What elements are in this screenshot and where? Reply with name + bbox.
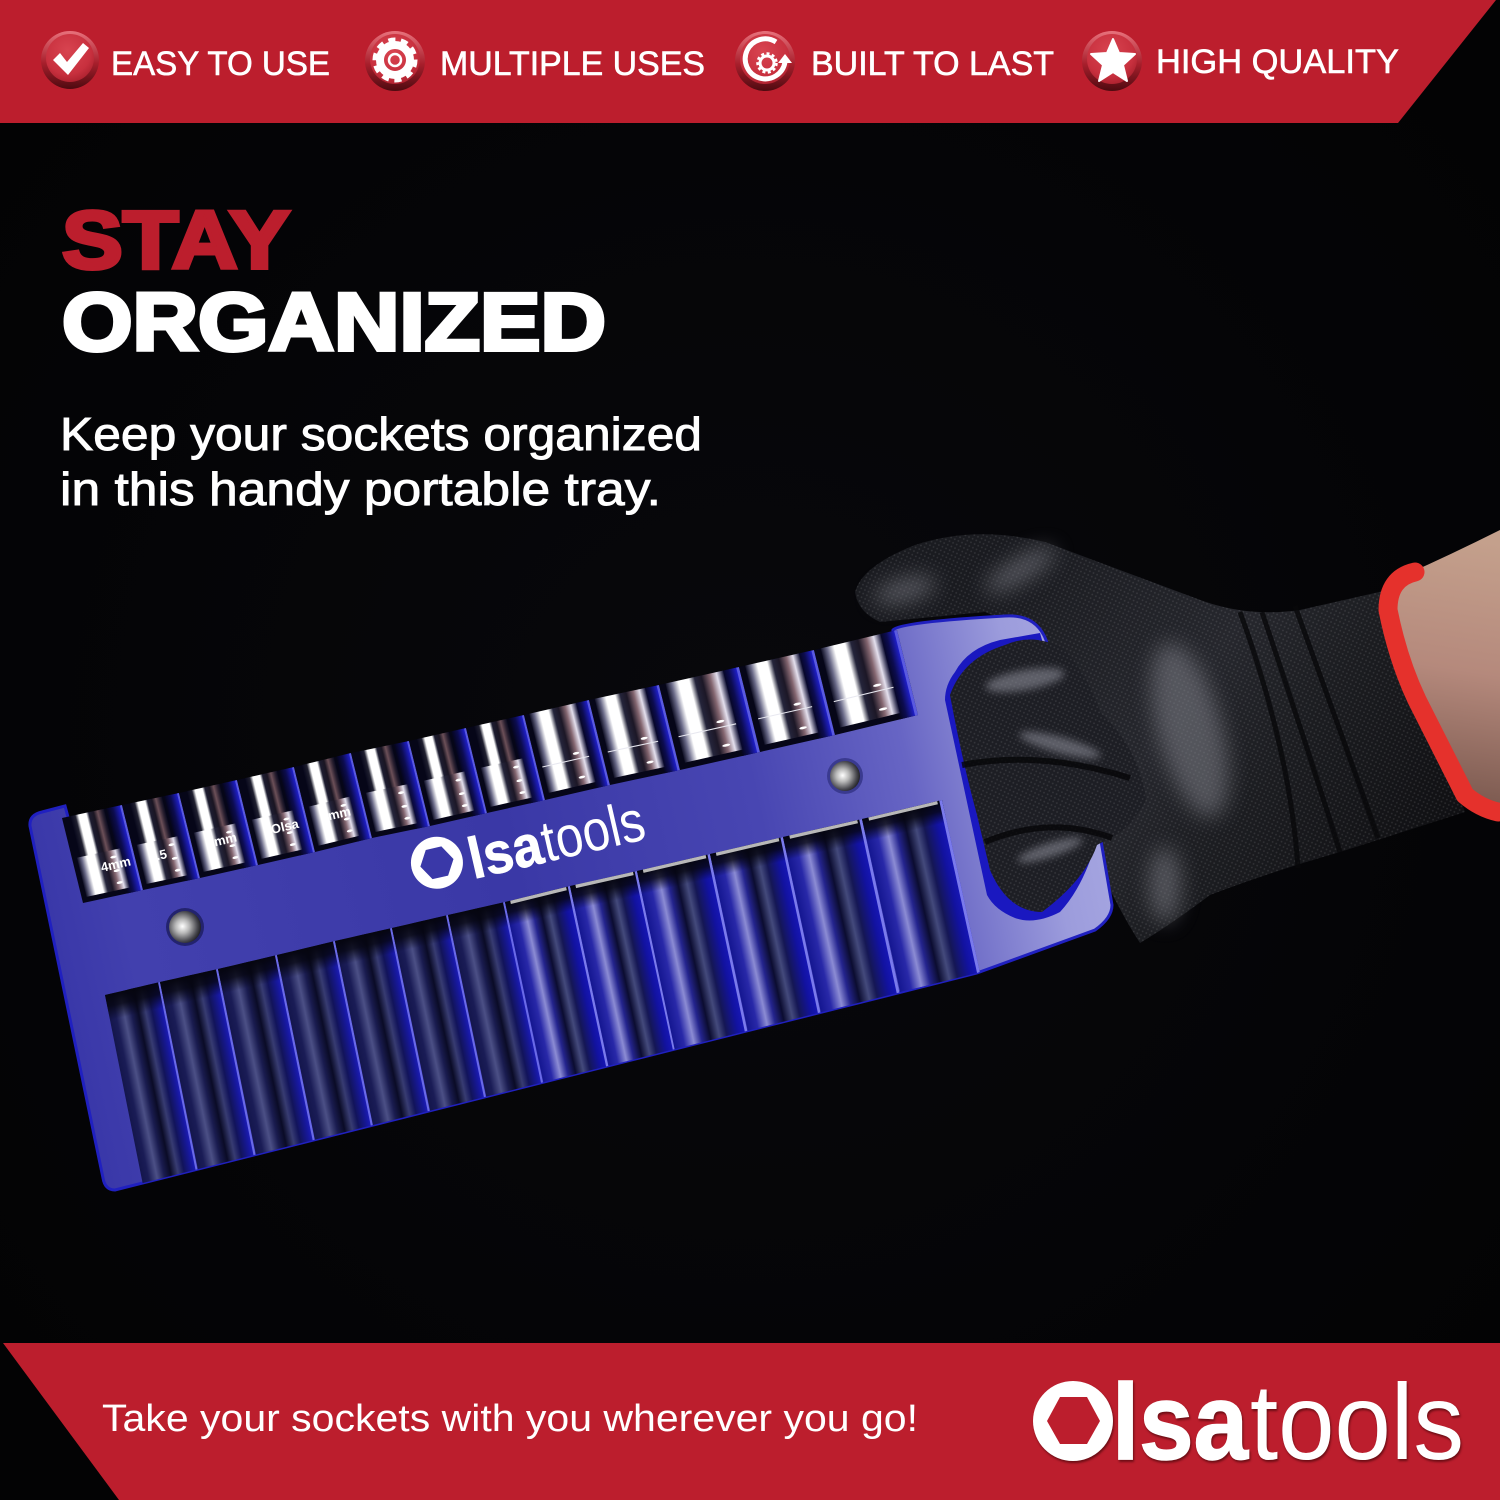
banner shape: [0, 0, 1496, 123]
glove highlights: [871, 540, 1244, 923]
feature: high quality: [1082, 31, 1399, 91]
socket size markings: 4mm: [99, 853, 132, 875]
socket size markings: 6mm: [319, 803, 352, 825]
red cuff trim: [1388, 572, 1498, 812]
finger texture: [950, 640, 1146, 912]
feature: built to last: [735, 31, 1054, 91]
glove palm and thumb: [855, 534, 1465, 943]
photo: hand in glove holding socket tray: [30, 530, 1500, 1190]
socket size markings: 5mm: [205, 829, 238, 851]
handle inner rim: [945, 633, 1098, 920]
tray logo: [405, 788, 651, 905]
feature: built to last: BUILT TO LAST: [811, 45, 1054, 83]
socket size markings: Olsa: [269, 816, 301, 837]
tray body: [30, 616, 1112, 1190]
feature: multiple uses: [365, 31, 705, 91]
tray logo: lsa: [462, 811, 549, 892]
socket size markings: 4.5: [147, 846, 168, 865]
glove knit texture: [855, 534, 1465, 943]
finger highlights: [984, 663, 1103, 867]
olsatools logo: lsa: [1112, 1361, 1249, 1482]
gloved fingers: [950, 640, 1146, 912]
feature: multiple uses: MULTIPLE USES: [440, 45, 705, 83]
banner shape: [3, 1343, 1500, 1500]
tray logo: tools: [535, 788, 651, 875]
olsatools logo: [1033, 1361, 1464, 1482]
bottom banner: [3, 1343, 1500, 1500]
heading line: stay: STAY: [62, 195, 290, 286]
description text: [60, 408, 702, 515]
wrist: [1392, 530, 1500, 815]
olsatools logo: tools: [1250, 1361, 1464, 1482]
lower empty slots: [105, 800, 980, 1190]
upper socket row: [62, 630, 918, 903]
feature: easy to use: [41, 31, 330, 89]
glove cuff folds: [1240, 606, 1378, 868]
description text: Keep your sockets organized: [60, 408, 702, 460]
finger creases: [962, 760, 1130, 842]
top banner: [0, 0, 1496, 123]
tagline: Take your sockets with you wherever you go!: [102, 1398, 918, 1440]
rivets: [166, 758, 863, 946]
description text: in this handy portable tray.: [60, 463, 661, 515]
socket size markings: [99, 803, 352, 875]
feature: easy to use: EASY TO USE: [111, 45, 330, 83]
feature: high quality: HIGH QUALITY: [1156, 43, 1399, 81]
heading: [62, 195, 606, 368]
heading line: organized: ORGANIZED: [62, 277, 606, 368]
